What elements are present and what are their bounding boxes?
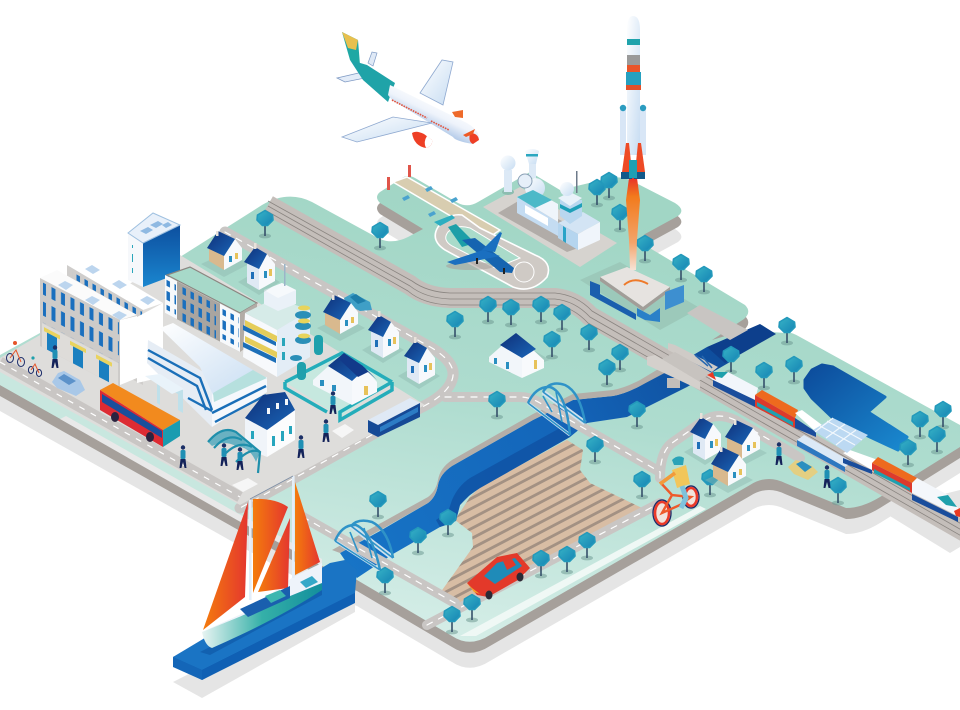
front edge strips <box>60 416 706 636</box>
river bridge west <box>335 521 393 570</box>
parked jet on the taxiway <box>434 215 514 274</box>
high speed train <box>707 372 960 522</box>
bus shelter <box>145 374 184 413</box>
white townhouse with mansard roof <box>245 392 295 457</box>
radar towers <box>500 149 539 195</box>
blue coach <box>368 398 420 437</box>
flying airliner <box>337 32 479 148</box>
city road <box>0 362 240 497</box>
airport runway and taxiway <box>387 165 548 289</box>
front office block <box>40 270 137 388</box>
large house in garden <box>313 353 377 405</box>
control tower and terminal <box>517 171 600 250</box>
station car <box>788 460 818 480</box>
child cyclists <box>6 341 42 376</box>
platform shadow <box>0 198 960 698</box>
rocket flame <box>626 178 640 270</box>
field <box>442 440 641 602</box>
station glass canopy <box>813 418 868 453</box>
canal <box>332 324 776 578</box>
railway <box>265 201 960 538</box>
large country house <box>488 333 550 378</box>
tree group <box>257 172 951 634</box>
rear office block <box>67 255 163 385</box>
lake <box>805 365 907 450</box>
crosswalk <box>232 424 354 492</box>
balcony apartment building <box>243 264 311 377</box>
glass tower <box>128 213 180 287</box>
blue teal car <box>344 293 372 311</box>
platform top surface <box>0 172 960 642</box>
red car <box>467 553 530 600</box>
village houses <box>201 231 767 493</box>
streamlined building with blue bands <box>147 323 267 427</box>
launch pad <box>580 262 748 340</box>
roads <box>225 232 800 625</box>
mid-rise block with green roof <box>165 267 257 352</box>
rail bridge <box>647 343 718 390</box>
teal glass shelter <box>208 430 260 473</box>
boat canal <box>173 560 357 680</box>
sailing boat <box>202 476 322 648</box>
river bridge east <box>528 384 585 435</box>
walled house garden <box>285 335 392 420</box>
small car on city road <box>52 371 85 396</box>
city pavement <box>0 255 425 505</box>
cyclist <box>653 456 699 526</box>
airport terminal pad <box>483 187 617 267</box>
railway station platform <box>797 435 852 472</box>
people <box>52 345 830 488</box>
platform side <box>0 183 960 653</box>
rocket <box>620 16 646 179</box>
red bus <box>100 383 180 447</box>
pale city front strip <box>0 368 322 566</box>
